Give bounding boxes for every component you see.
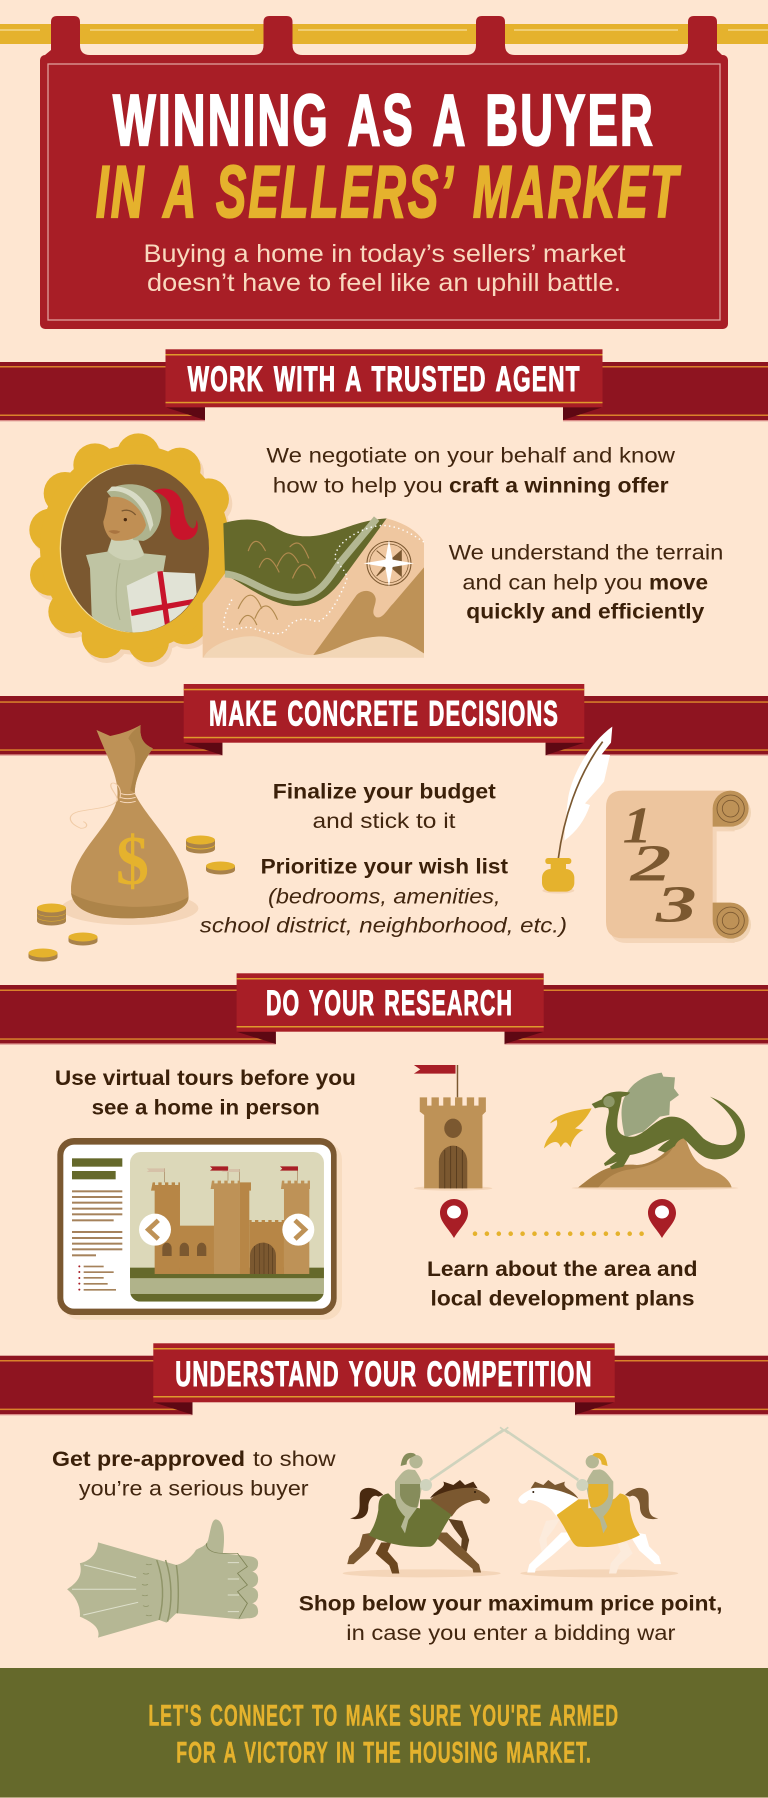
scroll numbers: 3	[654, 876, 697, 933]
text: negotiate: We negotiate on your behalf and know	[266, 445, 676, 468]
text: learn about area: local development plans	[430, 1288, 694, 1311]
footer panel	[0, 1668, 768, 1798]
text: decisions	[200, 780, 567, 938]
banner inner border	[48, 64, 720, 320]
map brown land	[313, 567, 424, 655]
plume	[153, 488, 198, 540]
text: wish list: (bedrooms, amenities,	[268, 885, 501, 908]
text: pre-approved	[52, 1448, 336, 1501]
subtitle: Buying a home in today’s sellers’ market	[144, 240, 626, 268]
text: budget	[273, 780, 496, 833]
map river	[225, 519, 377, 597]
text: terrain: move	[649, 571, 708, 594]
footer call to action	[148, 1700, 619, 1770]
tablet sidebar	[72, 1158, 122, 1291]
ribbon: make concrete decisions	[0, 684, 768, 756]
text: virtual tours: see a home in person	[92, 1097, 320, 1120]
text: terrain: We understand the terrain	[449, 541, 723, 564]
scroll numbers	[623, 798, 697, 933]
illustration: quill and ink	[542, 727, 612, 894]
illustration: dragon	[544, 1073, 745, 1190]
illustration: terrain map	[203, 518, 424, 658]
text: terrain: quickly and efficiently	[466, 601, 705, 624]
map green forest	[223, 518, 387, 606]
illustration: money bag	[61, 725, 198, 925]
armour	[86, 537, 166, 638]
text: maximum price point	[299, 1593, 722, 1645]
text: negotiate	[266, 445, 676, 497]
banner tabs	[45, 16, 722, 62]
text: virtual tours: Use virtual tours before you	[55, 1067, 356, 1090]
map compass	[363, 540, 414, 587]
text: budget: Finalize your budget	[273, 780, 496, 803]
text: pre-approved: Get pre-approved	[52, 1448, 245, 1471]
text: pre-approved: to show	[253, 1448, 336, 1471]
illustration: tablet with castle	[57, 1138, 342, 1320]
map dotted route	[224, 526, 423, 634]
banner panel	[40, 55, 728, 329]
text: virtual tours	[55, 1067, 356, 1120]
dragon body	[592, 1092, 745, 1169]
icon: map route	[440, 1199, 676, 1238]
ribbon: do your research	[0, 973, 768, 1045]
route dots	[475, 1231, 642, 1236]
text: terrain: and can help you	[462, 571, 642, 594]
text: agent points	[266, 445, 723, 624]
face	[103, 497, 146, 541]
text: pre-approved: you’re a serious buyer	[79, 1478, 309, 1501]
text: maximum price point: in case you enter a bidding war	[346, 1622, 675, 1645]
scroll numbers: 2	[629, 836, 671, 893]
text: negotiate: how to help you	[273, 474, 443, 497]
text: wish list: Prioritize your wish list	[261, 855, 508, 878]
text: learn about area	[427, 1258, 698, 1311]
text: negotiate: craft a winning offer	[449, 474, 669, 497]
illustration: numbered scroll	[606, 791, 751, 943]
text: budget: and stick to it	[312, 810, 456, 833]
map mountains	[238, 541, 315, 625]
knight: left green	[348, 1427, 508, 1573]
illustration: jousting knights	[343, 1427, 678, 1577]
text: maximum price point: Shop below your maximum price point,	[299, 1593, 722, 1616]
text: wish list	[200, 855, 567, 938]
tablet castle view	[130, 1152, 324, 1302]
map cream hills	[203, 636, 424, 658]
shield	[126, 572, 196, 632]
icon: gold coins	[28, 836, 235, 962]
tablet arrows	[139, 1214, 314, 1246]
text: learn about area: Learn about the area and	[427, 1258, 698, 1281]
ribbon: work with a trusted agent	[0, 349, 768, 421]
subtitle: doesn’t have to feel like an uphill battle.	[147, 269, 621, 297]
dragon fire	[544, 1108, 592, 1148]
helmet	[107, 484, 161, 541]
icon: left pin	[440, 1199, 468, 1238]
ribbon: understand your competition	[0, 1343, 768, 1415]
knight: right gold	[500, 1427, 660, 1573]
subtitle	[144, 240, 626, 297]
text: wish list: school district, neighborhood, etc.)	[200, 915, 567, 938]
heading: DO YOUR RESEARCH	[266, 984, 513, 1023]
text: terrain	[449, 541, 723, 624]
illustration: tower	[414, 1065, 492, 1191]
hanging rod	[0, 24, 768, 44]
scroll rolls	[713, 791, 749, 827]
illustration: gauntlet thumbs up	[67, 1519, 258, 1638]
dragon wing	[622, 1073, 679, 1137]
scroll numbers: 1	[623, 798, 652, 855]
illustration: knight portrait	[29, 433, 244, 667]
title banner	[40, 16, 728, 329]
icon: right pin	[648, 1199, 676, 1238]
dollar sign: $	[116, 823, 149, 900]
heading: MAKE CONCRETE DECISIONS	[209, 695, 559, 734]
